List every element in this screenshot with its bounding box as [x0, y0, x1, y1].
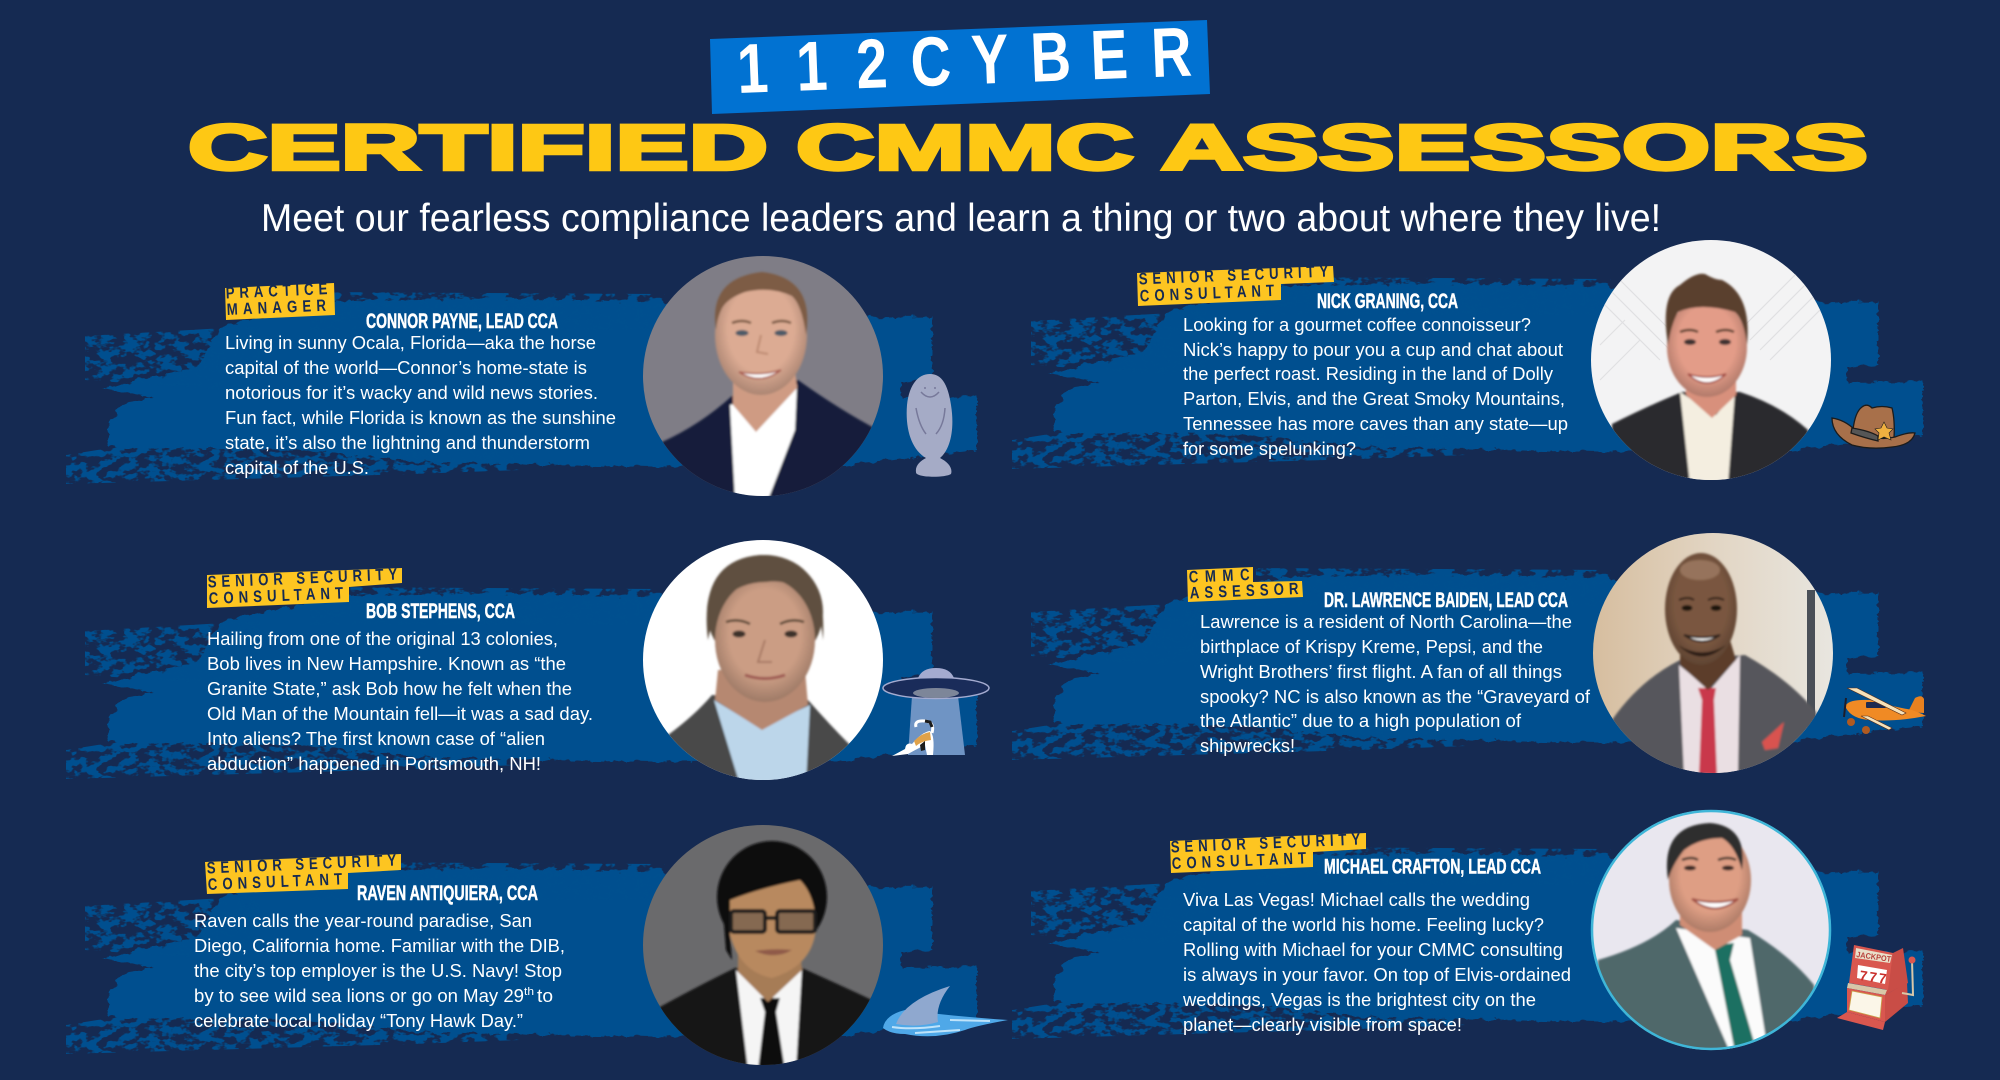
bio: Nick	[1183, 314, 1568, 459]
role tag: Practice Manager: MANAGER	[226, 296, 326, 319]
panel: Connor Payne	[66, 250, 977, 500]
title	[188, 111, 1868, 183]
role tag: Senior Security Consultant: SENIOR SECURITY	[206, 851, 397, 878]
name: Connor: CONNOR PAYNE, LEAD CCA	[366, 310, 558, 333]
icon: slot machine	[1837, 945, 1916, 1030]
bio: Connor: notorious for it’s wacky and wild news stories.	[225, 382, 598, 403]
role tag: Senior Security Consultant: SENIOR SECURITY	[207, 565, 398, 592]
bio: Lawrence: the Atlantic” due to a high population of	[1200, 710, 1522, 731]
icon: cowboy hat	[1832, 405, 1915, 448]
bio: Bob: Granite State,” ask Bob how he felt when the	[207, 678, 572, 699]
bio: Bob: Into aliens? The first known case of “alien	[207, 728, 545, 749]
panel: Lawrence Baiden	[1012, 530, 1926, 780]
role tag: Senior Security Consultant: SENIOR SECURITY	[1138, 262, 1329, 289]
icon: slot machine: 777	[1859, 967, 1888, 987]
bio: Nick: Nick’s happy to pour you a cup and chat about	[1183, 339, 1563, 360]
title: CMMC	[796, 111, 1134, 183]
bio: Nick: for some spelunking?	[1183, 438, 1356, 459]
panel: Bob Stephens	[66, 535, 989, 785]
icon: manatee	[907, 374, 952, 477]
panel: Raven Antiquiera	[66, 820, 1008, 1070]
bio: Lawrence: spooky? NC is also known as the “Graveyard of	[1200, 686, 1591, 707]
portrait ring	[1592, 811, 1830, 1049]
role tag: Senior Security Consultant: CONSULTANT	[1139, 282, 1274, 306]
bio: Connor: capital of the world—Connor’s home-state is	[225, 357, 587, 378]
bio: Michael	[1182, 889, 1571, 1035]
name: Michael: MICHAEL CRAFTON, LEAD CCA	[1324, 856, 1541, 878]
bio: Bob: Hailing from one of the original 13 colonies,	[207, 628, 558, 649]
role tag: Senior Security Consultant: CONSULTANT	[208, 584, 343, 608]
bio: Bob: Old Man of the Mountain fell—it was a sad day.	[207, 703, 593, 724]
panel: Nick Graning	[1012, 240, 1923, 485]
brush stroke: Bob	[66, 587, 977, 779]
bio: Raven	[194, 910, 565, 1031]
bio: Connor: Fun fact, while Florida is known as the sunshine	[225, 407, 616, 428]
brush stroke: Lawrence	[1012, 568, 1923, 760]
bio: Connor: state, it’s also the lightning and thunderstorm	[225, 432, 590, 453]
bio: Connor	[225, 332, 616, 478]
panel: Michael Crafton	[1012, 808, 1923, 1053]
bio: Connor: Living in sunny Ocala, Florida—aka the horse	[225, 332, 596, 353]
portrait: Bob	[640, 535, 890, 785]
icon: UFO abducting a cat	[883, 668, 989, 756]
bio: Michael: weddings, Vegas is the brightest city on the	[1182, 989, 1536, 1010]
bio: Raven: Diego, California home. Familiar with the DIB,	[194, 935, 565, 956]
bio: Lawrence: Wright Brothers’ first flight. A fan of all things	[1200, 661, 1562, 682]
role tag: CMMC Assessor: CMMC	[1188, 566, 1250, 587]
role tag: Senior Security Consultant	[207, 565, 402, 608]
title: CERTIFIED	[188, 111, 768, 183]
role tag: CMMC Assessor	[1187, 566, 1303, 603]
portrait: Connor	[640, 250, 890, 500]
role tag: Practice Manager	[225, 280, 335, 320]
portrait: Nick	[1590, 240, 1835, 485]
bio: Bob: abduction” happened in Portsmouth, NH!	[207, 753, 541, 774]
bio: Michael: capital of the world his home. Feeling lucky?	[1183, 914, 1544, 935]
portrait: Raven	[640, 820, 890, 1070]
bio: Lawrence: shipwrecks!	[1200, 735, 1295, 756]
bio: Lawrence: Lawrence is a resident of North Carolina—the	[1200, 611, 1572, 632]
brush stroke: Connor	[66, 292, 977, 484]
role tag: CMMC Assessor: ASSESSOR	[1189, 580, 1299, 603]
bio: Raven: by to see wild sea lions or go on May 29	[194, 985, 524, 1006]
bio: Michael: Viva Las Vegas! Michael calls the wedding	[1183, 889, 1530, 910]
role tag: Senior Security Consultant: CONSULTANT	[207, 870, 342, 894]
bio: Raven: Raven calls the year-round paradise, San	[194, 910, 532, 931]
bio: Nick: Looking for a gourmet coffee connoisseur?	[1183, 314, 1531, 335]
bio: Connor: capital of the U.S.	[225, 457, 369, 478]
bio: Nick: Tennessee has more caves than any state—up	[1183, 413, 1568, 434]
brush stroke: Raven	[66, 862, 977, 1054]
role tag: Senior Security Consultant	[1170, 830, 1366, 873]
bio: Michael: planet—clearly visible from space!	[1183, 1014, 1462, 1035]
bio: Lawrence: birthplace of Krispy Kreme, Pepsi, and the	[1200, 636, 1543, 657]
bio: Raven: the city’s top employer is the U.S. Navy! Stop	[194, 960, 562, 981]
title: ASSESSORS	[1161, 111, 1868, 183]
brush stroke: Michael	[1012, 847, 1923, 1039]
brush stroke: Nick	[1012, 277, 1923, 469]
role tag: Senior Security Consultant	[205, 851, 401, 894]
name: Nick: NICK GRANING, CCA	[1317, 290, 1458, 313]
icon: slot machine: JACKPOT	[1856, 950, 1892, 964]
bio: Nick: the perfect roast. Residing in the land of Dolly	[1183, 363, 1554, 384]
bio: Bob: Bob lives in New Hampshire. Known as “the	[207, 653, 566, 674]
bio: Lawrence	[1200, 611, 1591, 756]
bio: Nick: Parton, Elvis, and the Great Smoky Mountains,	[1183, 388, 1565, 409]
role tag: Practice Manager: PRACTICE	[225, 280, 328, 303]
portrait: Lawrence	[1590, 530, 1835, 780]
logo banner: 112 Cyber: 112CYBER	[736, 14, 1193, 108]
name: Lawrence: DR. LAWRENCE BAIDEN, LEAD CCA	[1324, 589, 1568, 612]
role tag: Senior Security Consultant	[1137, 262, 1334, 306]
bio: Bob	[207, 628, 593, 774]
subtitle: Meet our fearless compliance leaders and learn a thing or two about where they live!	[261, 197, 1661, 240]
bio: Raven: to	[537, 985, 553, 1006]
role tag: Senior Security Consultant: SENIOR SECURITY	[1170, 830, 1361, 857]
bio: Raven: th	[524, 986, 534, 998]
role tag: Senior Security Consultant: CONSULTANT	[1171, 849, 1306, 873]
bio: Michael: Rolling with Michael for your CMMC consulting	[1183, 939, 1563, 960]
icon: biplane	[1844, 688, 1926, 734]
portrait: Michael	[1590, 808, 1835, 1053]
name: Bob: BOB STEPHENS, CCA	[366, 600, 515, 623]
name: Raven: RAVEN ANTIQUIERA, CCA	[357, 882, 538, 905]
bio: Raven: celebrate local holiday “Tony Hawk Day.”	[194, 1010, 523, 1031]
bio: Michael: is always in your favor. On top of Elvis-ordained	[1183, 964, 1571, 985]
icon: shark fin	[883, 986, 1008, 1036]
